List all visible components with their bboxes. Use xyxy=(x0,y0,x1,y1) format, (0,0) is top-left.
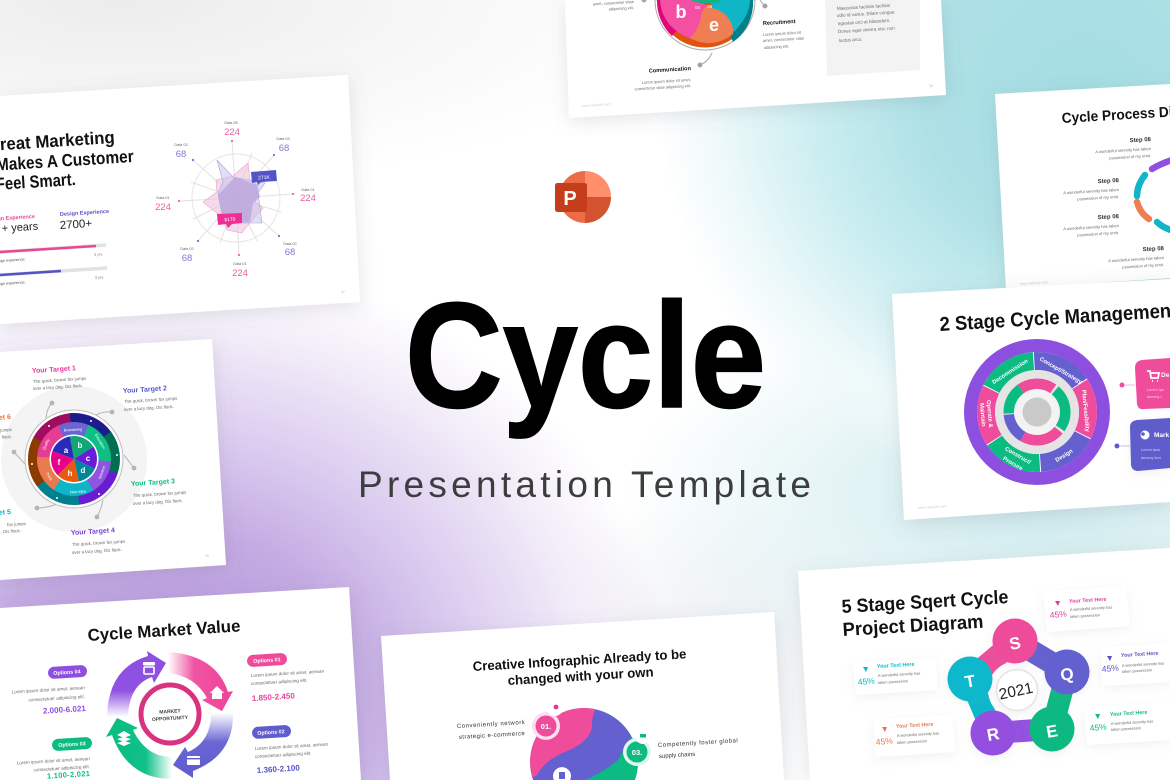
label: recruitment: Recruitment xyxy=(763,19,796,27)
heading: five stage xyxy=(841,587,1009,641)
center ring: OPPORTUNITY xyxy=(152,715,189,723)
heading: creative infographic: changed with your own xyxy=(507,664,654,688)
node 03 xyxy=(623,728,651,766)
card: five stage slide xyxy=(798,548,1170,780)
radar chart: 224 xyxy=(300,193,316,204)
panel: cycle process slide xyxy=(995,84,1170,289)
panel: top wheel slide xyxy=(565,0,946,118)
blue callout xyxy=(1114,418,1170,471)
icon: card xyxy=(187,756,200,765)
option labels: Options 04 xyxy=(53,669,81,677)
stat card: green: 45% xyxy=(1089,722,1108,733)
radar chart: 271K xyxy=(258,175,271,181)
stat card: cyan: Your Text Here xyxy=(877,662,915,670)
segmented wheel: Decommission xyxy=(992,358,1030,386)
radar chart: Data 01 xyxy=(233,262,247,266)
stat card: blue: taken possession xyxy=(1122,667,1152,674)
panel: marketing radar slide xyxy=(0,75,360,324)
label: communication: Lorem ipsum dolor sit amet, xyxy=(641,77,691,85)
metaball cycle diagram: E xyxy=(1045,721,1059,742)
step text: possession of my entir. xyxy=(1109,153,1151,160)
side labels: strategic e-commerce xyxy=(459,731,526,741)
option labels: 1.850-2.450 xyxy=(252,691,296,703)
panel copy: Maecenas facilisis facilisis xyxy=(837,3,891,11)
node 03: 03. xyxy=(632,748,642,757)
stat card: orange: 45% xyxy=(875,736,894,747)
radar chart: 224 xyxy=(224,127,240,138)
step text: possession of my entir. xyxy=(1122,262,1164,269)
stat card: orange: taken possession xyxy=(897,738,927,745)
cycle wheel: b xyxy=(78,441,83,450)
stat card: green: A wonderful serenity has xyxy=(1111,718,1153,726)
footer url: www.website.com xyxy=(918,504,947,510)
radar chart: Data 01 xyxy=(301,188,315,192)
cycle wheel: d xyxy=(81,466,86,475)
option labels: 2.000-6.021 xyxy=(43,704,87,716)
option labels: Options 01 xyxy=(253,657,281,665)
option labels: consectetuer adipiscing elit. xyxy=(33,764,90,772)
experience stats xyxy=(0,209,109,286)
side labels: Conveniently network xyxy=(457,720,526,730)
target text blocks: Your Target 2 xyxy=(123,385,167,395)
metaball cycle diagram: Q xyxy=(1059,664,1075,685)
stat card: pink: taken possession xyxy=(1070,612,1100,619)
heading: creative infographic xyxy=(472,646,687,688)
stat card: pink: Your Text Here xyxy=(1069,597,1107,605)
page number: 39 xyxy=(205,554,209,558)
target text blocks: The quick, brown fox jumps xyxy=(33,376,87,384)
center ring xyxy=(141,685,199,743)
step text xyxy=(1063,137,1165,269)
step text: A wonderful serenity has taken xyxy=(1095,146,1152,154)
stat card: blue: Your Text Here xyxy=(1121,651,1159,659)
connector pins xyxy=(642,0,767,67)
option labels: consectetuer adipiscing elit. xyxy=(251,678,307,686)
arrow: blue xyxy=(173,713,233,778)
step text: possession of my entir. xyxy=(1077,194,1119,201)
segmented wheel: Plan/Feasibility xyxy=(1080,390,1090,433)
experience stats: ign experience: xyxy=(0,257,26,263)
node 01: 01. xyxy=(541,722,551,731)
cycle wheel: Quality xyxy=(42,438,50,451)
cycle segments xyxy=(1137,160,1170,231)
stat card: pink: A wonderful serenity has xyxy=(1070,604,1112,612)
radar chart: Data 05 xyxy=(224,121,238,125)
card: management slide xyxy=(892,279,1170,520)
card: process slide xyxy=(995,84,1170,289)
cycle wheel: New Idea xyxy=(70,490,87,494)
icon: layers xyxy=(117,731,131,746)
page number: 37 xyxy=(341,290,345,294)
gray backdrop blob xyxy=(1,386,147,532)
option labels: Lorem ipsum dolor sit amet, aenean xyxy=(255,742,329,751)
heading: five stage: Project Diagram xyxy=(842,612,984,641)
option labels: consectetuer adipiscing elit. xyxy=(28,694,85,702)
segmented wheel: Concept/Strategy xyxy=(1038,357,1083,386)
experience stats: 3 yrs. xyxy=(94,252,103,257)
cycle wheel fragment: b xyxy=(676,2,686,22)
target text blocks: fox jumps xyxy=(7,521,27,527)
cycle arrows xyxy=(106,651,233,779)
metaball cycle diagram: R xyxy=(985,724,1001,745)
experience stats: + years xyxy=(1,221,39,235)
segmented wheel xyxy=(964,339,1110,485)
option labels: Lorem ipsum dolor sit amet, aenean xyxy=(251,669,325,678)
title: Cycle xyxy=(405,271,766,439)
arrow: purple xyxy=(107,651,166,717)
experience stats: ign experience: xyxy=(0,280,26,286)
stat card: orange: Your Text Here xyxy=(896,722,934,730)
node 02 icon xyxy=(553,767,571,780)
segmented wheel: Operate & xyxy=(985,400,993,428)
blue callout: Mark xyxy=(1154,432,1170,439)
metaball cycle diagram: 2021 xyxy=(997,680,1035,703)
cycle wheel: Brandering xyxy=(64,428,82,432)
heading: creative infographic: Creative Infographic Already to be xyxy=(472,646,687,674)
metaball cycle diagram: T xyxy=(963,671,977,692)
label fragment xyxy=(592,0,635,12)
option labels: consectetuer adipiscing elit. xyxy=(255,751,311,759)
radar chart: Data 03 xyxy=(174,143,188,147)
stat card: pink: 45% xyxy=(1049,609,1068,620)
panel: two stage cycle slide xyxy=(892,279,1170,520)
heading: great marketing: reat Marketing xyxy=(0,127,115,154)
experience stats: 3 yrs. xyxy=(95,275,104,280)
panel copy: odio id varius. Etiam congue xyxy=(837,9,895,18)
radar chart: 224 xyxy=(232,268,248,279)
stat card: green xyxy=(1084,702,1170,745)
heading: five stage: 5 Stage Sqert Cycle xyxy=(841,587,1009,618)
cycle wheel: Solution xyxy=(98,466,106,480)
label: recruitment: Lorem ipsum dolor sit xyxy=(763,30,802,37)
panel copy: Donec eget viverra nisi, non xyxy=(838,26,895,34)
card: top slide xyxy=(565,0,946,118)
panel copy: egestas orci at bibendum. xyxy=(838,18,891,26)
panel: creative infographic slide xyxy=(381,612,784,780)
target text blocks: Your Target 3 xyxy=(131,478,175,488)
radar chart: Data 01 xyxy=(156,196,170,200)
icon: house xyxy=(210,686,224,699)
experience stats: 2700+ xyxy=(59,218,93,232)
pink callout: Lorem Ips xyxy=(1147,388,1164,392)
label: communication xyxy=(634,66,692,91)
stat card: green: taken possession xyxy=(1111,725,1141,732)
target text blocks xyxy=(0,365,187,555)
cycle wheel fragment: 04 xyxy=(695,5,701,10)
radar chart: Data 02 xyxy=(283,242,297,246)
target text blocks: The quick, brown fox jumps xyxy=(72,539,126,547)
label fragment: adipiscing elit. xyxy=(609,5,634,12)
cycle wheel fragment: e xyxy=(709,15,719,35)
step text: A wonderful serenity has taken xyxy=(1063,223,1120,231)
label: communication: consectetur vitae adipiscing elit. xyxy=(634,83,691,91)
blue callout: dummy text xyxy=(1141,456,1162,460)
option labels: Options 02 xyxy=(257,729,285,737)
cycle wheel: f xyxy=(58,458,61,467)
cycle wheel: c xyxy=(86,454,91,463)
option labels xyxy=(12,653,329,780)
radar chart: $170 xyxy=(224,217,236,223)
radar chart: 224 xyxy=(155,202,171,213)
target text blocks: Your Target 1 xyxy=(32,365,76,375)
metaball cycle diagram: S xyxy=(1008,633,1022,654)
step text: A wonderful serenity has taken xyxy=(1063,187,1120,195)
gray text panel xyxy=(825,0,920,76)
step text: Step 08 xyxy=(1097,178,1120,185)
stat card: orange: A wonderful serenity has xyxy=(897,730,939,738)
stat card: cyan: A wonderful serenity has xyxy=(878,670,920,678)
segmented wheel: Design xyxy=(1055,448,1075,464)
panel: your target wheel slide xyxy=(0,339,226,580)
target text blocks: jumps xyxy=(0,427,13,433)
step text: A wonderful serenity has taken xyxy=(1108,255,1165,263)
icon: store xyxy=(143,662,155,674)
heading: cycle market value: Cycle Market Value xyxy=(87,616,241,645)
footer url: www.website.com xyxy=(582,102,611,108)
subtitle: Presentation Template xyxy=(358,464,811,505)
icon: powerpoint logo: P xyxy=(563,188,577,210)
target text blocks: over a lazy dog. Dis flock. xyxy=(124,404,174,412)
stat card: cyan: 45% xyxy=(857,676,876,687)
target text blocks: flock. xyxy=(2,434,12,440)
label: communication: Communication xyxy=(649,66,692,75)
step text: possession of my entir. xyxy=(1077,230,1119,237)
cycle wheel xyxy=(25,410,123,508)
option labels: Options 03 xyxy=(58,741,86,749)
stat card: green: Your Text Here xyxy=(1110,710,1148,718)
target text blocks: over a lazy dog. Dis flock. xyxy=(72,547,122,555)
cycle wheel: Education xyxy=(94,433,106,450)
step text: Step 08 xyxy=(1142,246,1165,253)
cycle wheel: h xyxy=(68,469,73,478)
stat card: cyan xyxy=(853,658,938,695)
option labels: Lorem ipsum dolor sit amet, aenean xyxy=(17,756,90,765)
target text blocks: The quick, brown fox jumps xyxy=(124,396,178,404)
step text: Step 08 xyxy=(1129,137,1152,144)
option labels: Lorem ipsum dolor sit amet, aenean xyxy=(12,685,85,694)
card: creative slide xyxy=(381,612,784,780)
center ring: MARKET xyxy=(159,708,181,716)
swirl circle xyxy=(528,706,640,780)
panel copy: luctus arcu. xyxy=(839,37,863,43)
stat card: orange xyxy=(873,715,956,757)
stat card: blue xyxy=(1100,643,1170,686)
panel copy xyxy=(837,3,895,43)
connector pins xyxy=(12,401,136,519)
pink callout: De xyxy=(1161,372,1170,379)
card: market value slide xyxy=(0,587,361,780)
icon: powerpoint logo xyxy=(555,171,611,223)
arrow: green xyxy=(106,718,172,779)
arrow: pink xyxy=(168,652,233,711)
cycle wheel fragment: 05 xyxy=(707,4,713,9)
target text blocks: , Dis flock. xyxy=(1,528,21,534)
radar chart: 68 xyxy=(285,247,295,258)
panel: cycle market value slide xyxy=(0,587,361,780)
stat card: blue: A wonderful serenity has xyxy=(1122,660,1164,668)
page number: 34 xyxy=(929,84,933,88)
segmented wheel: Maintain xyxy=(978,403,986,427)
side labels: supply chains xyxy=(659,752,695,760)
target text blocks: over a lazy dog. Dis flock. xyxy=(133,498,183,506)
radar chart: 68 xyxy=(182,253,192,264)
cycle wheel fragment xyxy=(655,0,755,50)
segmented wheel: Procure xyxy=(1002,456,1024,473)
experience stats: Design Experience xyxy=(60,209,109,218)
option labels: 1.360-2.100 xyxy=(257,763,301,775)
target text blocks: over a lazy dog. Dis flock. xyxy=(33,383,83,391)
blue callout: Lorem Ipsu xyxy=(1141,448,1160,452)
stat card: cyan: taken possession xyxy=(878,678,908,685)
target text blocks: Your Target 4 xyxy=(71,527,115,537)
side labels xyxy=(457,720,738,760)
radar chart: Data 03 xyxy=(276,137,290,141)
radar chart: Data 02 xyxy=(180,247,194,251)
segmented wheel: Construct/ xyxy=(1003,446,1032,466)
label: recruitment: amet, consectetur vitae xyxy=(763,35,805,43)
cycle wheel: a xyxy=(64,446,69,455)
radar chart xyxy=(155,121,316,279)
footer url: www.website.com xyxy=(1020,280,1049,286)
label: recruitment: adipiscing elit. xyxy=(764,43,789,50)
stat card: blue: 45% xyxy=(1101,663,1120,674)
metaball cycle diagram xyxy=(948,618,1090,756)
side labels: Competently foster global xyxy=(658,738,738,749)
card: marketing slide xyxy=(0,75,360,324)
label: recruitment xyxy=(763,19,805,50)
stat card: pink xyxy=(1043,586,1130,632)
panel: five stage diagram slide xyxy=(798,548,1170,780)
step text: Step 08 xyxy=(1097,214,1120,221)
node 01 xyxy=(532,700,563,740)
radar chart: 68 xyxy=(279,143,289,154)
card: target slide xyxy=(0,339,226,580)
target text blocks: The quick, brown fox jumps xyxy=(133,490,187,498)
radar chart: 68 xyxy=(176,149,186,160)
cycle wheel: Think xyxy=(45,471,53,482)
pink callout xyxy=(1120,358,1170,409)
heading: great marketing xyxy=(0,127,134,194)
pink callout: dummy t xyxy=(1147,395,1163,399)
